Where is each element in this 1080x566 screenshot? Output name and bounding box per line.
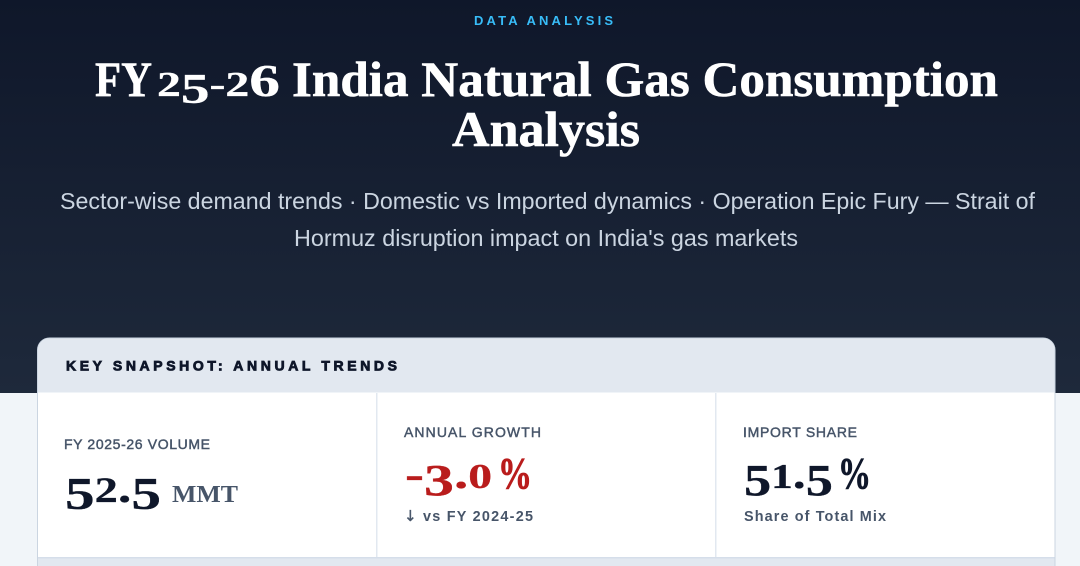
subtitle: Hormuz disruption impact on India's gas markets (294, 225, 798, 251)
stat: import share: IMPORT SHARE (743, 424, 857, 440)
stat: FY 2025-26 volume: 2 (95, 470, 118, 510)
card header (38, 338, 1054, 392)
stat: import share (743, 424, 886, 525)
stat: FY 2025-26 volume (64, 436, 238, 519)
stat: annual growth (404, 424, 541, 525)
stat: import share: 1 (771, 457, 793, 496)
stat: annual growth: % (498, 449, 532, 498)
title: FY (95, 51, 152, 107)
stat: annual growth: ↓ (404, 507, 417, 525)
stat: import share: . (793, 452, 803, 498)
stat: FY 2025-26 volume: . (118, 466, 131, 512)
title: 6 (249, 56, 280, 106)
eyebrow label: DATA ANALYSIS (474, 13, 613, 28)
stat: annual growth: . (454, 452, 468, 498)
stat: FY 2025-26 volume: MMT (172, 482, 238, 508)
stat: import share: % (838, 449, 871, 498)
stat: FY 2025-26 volume: 5 (131, 468, 161, 519)
header panel (0, 0, 1080, 393)
card heading: KEY SNAPSHOT: ANNUAL TRENDS (66, 358, 397, 374)
card footer strip (38, 557, 1054, 566)
title: 2 (157, 65, 181, 104)
stat: annual growth: vs FY 2024-25 (423, 509, 533, 525)
panel: key snapshot card (38, 338, 1055, 566)
stat: FY 2025-26 volume: 5 (65, 468, 95, 519)
subtitle: Sector-wise demand trends · Domestic vs Imported dynamics · Operation Epic Fury — Strait of (60, 188, 1036, 214)
stat: import share: 5 (806, 456, 833, 505)
title: 5 (181, 67, 210, 113)
stat: import share: Share of Total Mix (744, 509, 886, 525)
stat: import share: 5 (744, 456, 771, 505)
title: Analysis (452, 101, 640, 157)
subtitle (60, 188, 1036, 251)
title: -2 (210, 65, 249, 104)
title: India Natural Gas Consumption (292, 51, 998, 107)
stat: annual growth: - (405, 452, 419, 498)
stat: annual growth: 3 (424, 456, 454, 505)
stat: FY 2025-26 volume: FY 2025-26 VOLUME (64, 436, 210, 452)
stat: annual growth: 0 (468, 457, 492, 496)
title (95, 51, 998, 157)
stat: annual growth: ANNUAL GROWTH (404, 424, 541, 440)
